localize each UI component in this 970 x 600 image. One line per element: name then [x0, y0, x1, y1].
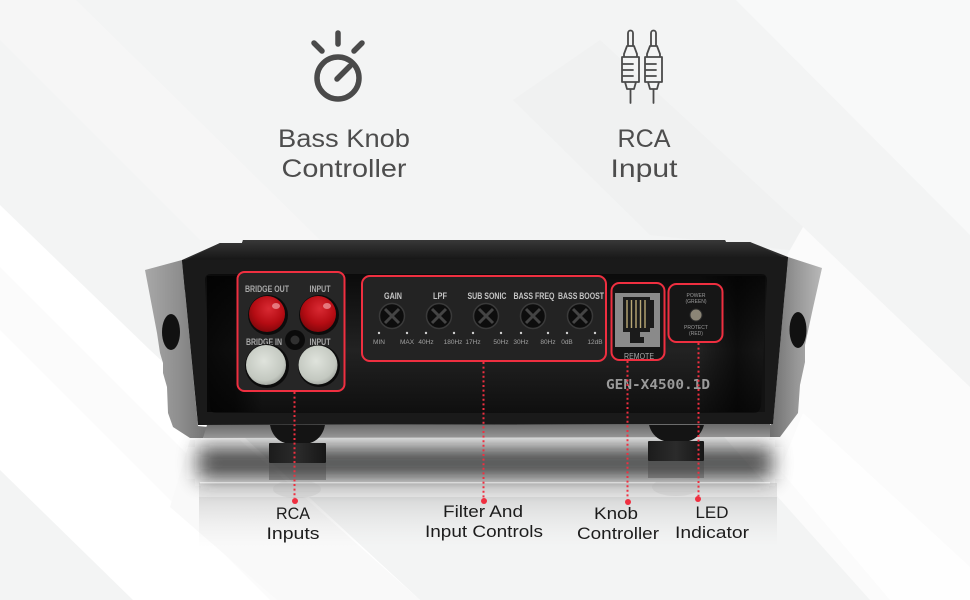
panel: RCA connectors: BRIDGE IN — [246, 337, 282, 348]
panel: RCA connectors — [238, 272, 344, 391]
panel: filter and input controls: 40Hz — [418, 339, 434, 346]
label: RCA Inputs: Inputs — [266, 524, 320, 543]
side screw holes — [162, 314, 180, 350]
heading: RCA Input: Input — [610, 155, 678, 183]
label: Filter And Input Controls — [425, 502, 543, 541]
panel: filter and input controls: 80Hz — [540, 339, 556, 346]
panel: LED indicator: (RED) — [689, 331, 703, 337]
panel: filter and input controls: LPF — [433, 291, 447, 302]
panel: RCA connectors: INPUT — [310, 284, 331, 295]
heading: Bass Knob Controller: Controller — [282, 155, 406, 183]
icon: bass knob — [314, 33, 362, 99]
label: Knob Controller — [577, 504, 659, 543]
panel: filter and input controls: 0dB — [561, 339, 573, 346]
callout lines — [292, 343, 701, 505]
recessed faceplate — [205, 274, 767, 413]
bottom silver strip — [203, 424, 770, 438]
heading: Bass Knob Controller: Bass Knob — [278, 125, 410, 153]
label: LED Indicator: Indicator — [675, 523, 749, 542]
panel: filter and input controls — [362, 276, 606, 361]
icon: RCA plugs — [622, 30, 662, 103]
panel: LED indicator: PROTECT — [684, 325, 708, 331]
panel: filter and input controls: BASS BOOST — [558, 291, 604, 302]
panel: filter and input controls: 180Hz — [444, 339, 462, 346]
panel: remote knob port — [612, 283, 664, 361]
label: Knob Controller: Knob — [594, 504, 638, 523]
heading: RCA Input — [610, 125, 678, 183]
model number: GEN-X4500.1D — [606, 378, 710, 393]
top casing — [182, 240, 788, 290]
floor shadow and reflection — [198, 447, 777, 547]
left silver end cap — [145, 260, 208, 438]
heading: Bass Knob Controller — [278, 125, 410, 183]
panel: remote knob port: REMOTE — [624, 351, 654, 361]
panel: RCA connectors: BRIDGE OUT — [245, 284, 289, 295]
heading: RCA Input: RCA — [618, 125, 671, 153]
panel: filter and input controls: 17Hz — [465, 339, 481, 346]
panel: filter and input controls: MAX — [400, 339, 415, 346]
panel: LED indicator: POWER — [687, 293, 706, 299]
panel: LED indicator: (GREEN) — [685, 299, 707, 305]
label: RCA Inputs — [266, 504, 320, 543]
casing top bevel — [186, 240, 784, 260]
label: Knob Controller: Controller — [577, 524, 659, 543]
amplifier — [145, 240, 822, 498]
panel: LED indicator — [668, 284, 722, 342]
panel: filter and input controls: 50Hz — [493, 339, 509, 346]
panel: filter and input controls: BASS FREQ — [514, 291, 554, 302]
amplifier feet — [269, 425, 704, 498]
panel: RCA connectors: INPUT — [310, 337, 331, 348]
panel: filter and input controls: 30Hz — [513, 339, 529, 346]
panel: filter and input controls: MIN — [373, 339, 385, 346]
label: LED Indicator — [675, 503, 749, 542]
label: LED Indicator: LED — [696, 503, 728, 522]
label: RCA Inputs: RCA — [276, 504, 311, 523]
label: Filter And Input Controls: Filter And — [443, 502, 523, 521]
faceplate side shading — [207, 276, 765, 412]
label: Filter And Input Controls: Input Controls — [425, 522, 543, 541]
black front panel — [182, 257, 788, 425]
panel: filter and input controls: 12dB — [587, 339, 603, 346]
right silver end cap — [770, 257, 822, 437]
panel: filter and input controls: GAIN — [384, 291, 402, 302]
panel: filter and input controls: SUB SONIC — [468, 291, 507, 302]
